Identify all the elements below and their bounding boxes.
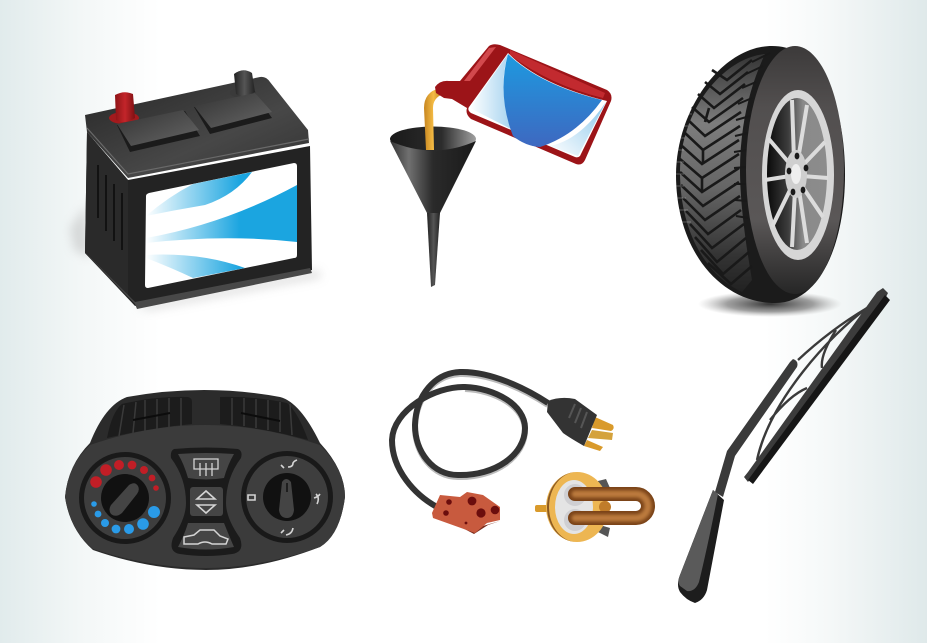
- panel face: [65, 425, 345, 568]
- plug: [547, 398, 614, 451]
- cord shadow: [415, 374, 548, 477]
- tire tread: [676, 46, 845, 303]
- wiper arm: [715, 359, 798, 497]
- wheel rim: [762, 90, 834, 260]
- direction button: [190, 487, 223, 516]
- heater coil: [575, 494, 648, 518]
- lid caps: [117, 93, 272, 152]
- heater disc: [546, 472, 608, 542]
- tire shadow: [698, 291, 842, 317]
- panel housing: [65, 390, 345, 570]
- positive terminal: [109, 92, 139, 124]
- dial pointer: [279, 479, 294, 518]
- icon: tire: [675, 46, 845, 317]
- battery shadow: [70, 205, 322, 310]
- wiper blade: [744, 288, 888, 482]
- heater stub: [535, 505, 549, 512]
- icon: car battery: [70, 70, 322, 310]
- funnel stem: [427, 213, 440, 287]
- heater element: [535, 472, 648, 542]
- wiper handle: [678, 490, 724, 603]
- wiper frame: [757, 308, 867, 460]
- battery label: [145, 163, 297, 288]
- mode symbols: [248, 460, 320, 535]
- recirculate button: [178, 523, 234, 550]
- tread surface: [680, 54, 765, 292]
- oil bottle: [435, 44, 612, 165]
- right vent: [220, 397, 308, 440]
- icon: engine block heater cord: [392, 372, 648, 542]
- shoulder blocks: [734, 53, 770, 218]
- heater coil sockets: [564, 484, 586, 506]
- oil stream: [424, 88, 443, 150]
- heater tabs: [598, 479, 610, 537]
- center button column: [171, 448, 242, 556]
- icon: oil bottle pouring into funnel: [390, 44, 612, 287]
- tire sidewall: [746, 46, 844, 294]
- icon: climate control panel: [65, 390, 345, 570]
- funnel cone: [390, 141, 476, 213]
- red connector: [432, 492, 500, 534]
- blue cold dots: [91, 501, 160, 534]
- funnel rim back: [390, 126, 476, 152]
- icon: windshield wiper: [678, 288, 890, 603]
- rear defrost button: [178, 453, 234, 480]
- left vent: [107, 397, 192, 438]
- battery lid: [85, 77, 309, 178]
- negative terminal: [230, 70, 256, 98]
- rim spokes: [765, 100, 828, 247]
- temperature dial: [79, 452, 171, 544]
- cord: [392, 372, 548, 507]
- tread chevrons: [680, 60, 752, 284]
- bottle label: [468, 53, 607, 157]
- battery body: [84, 132, 312, 309]
- red heat dots: [90, 460, 159, 491]
- fan dial: [241, 451, 333, 543]
- dial pointer: [110, 483, 139, 516]
